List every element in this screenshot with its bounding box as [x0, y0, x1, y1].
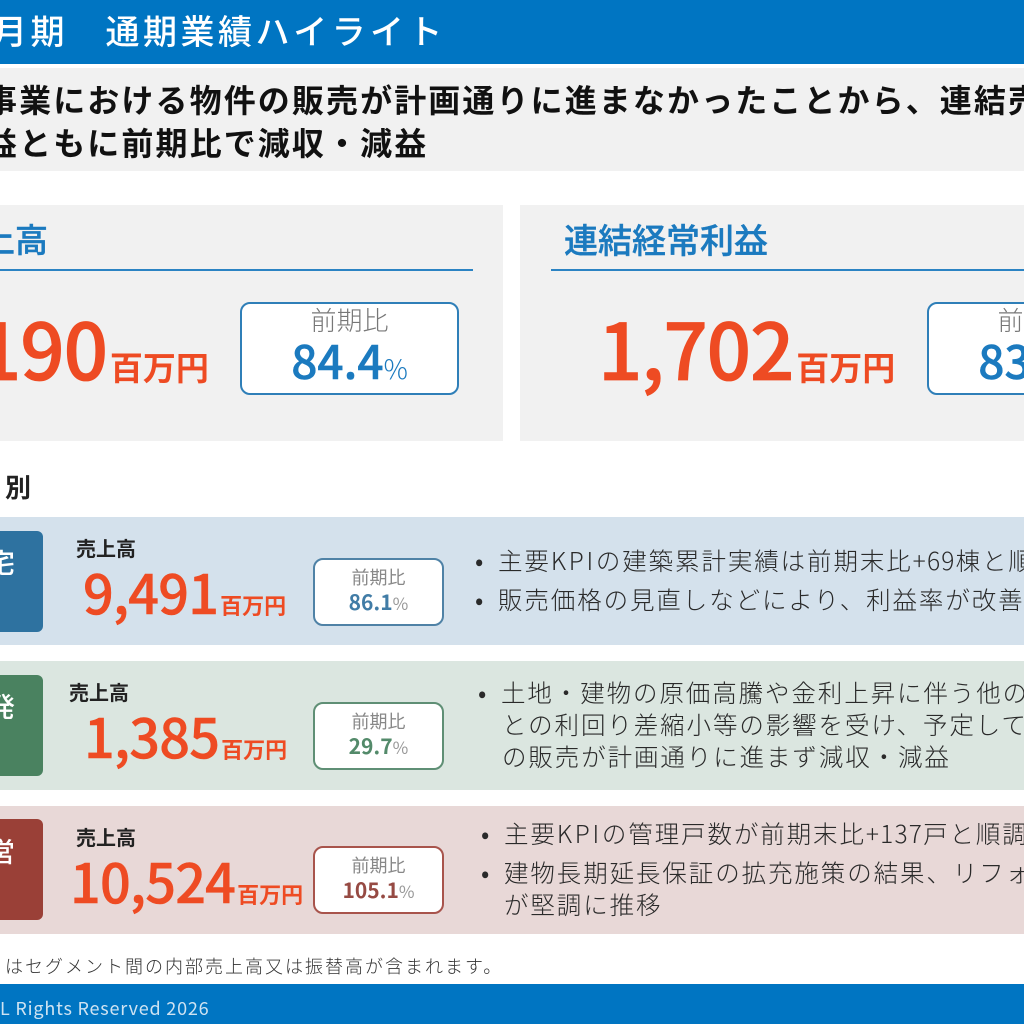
sales label: 売上高 — [76, 533, 136, 562]
segment chip — [0, 819, 43, 920]
sales label: 売上高 — [69, 677, 129, 706]
heading: ordinary profit: 連結経常利益 — [564, 214, 768, 263]
sales value: 9,491百万円 — [83, 551, 286, 630]
panel: segment 1 — [0, 517, 1024, 645]
bullet 1: • — [475, 543, 483, 578]
sales label: 売上高 — [76, 822, 136, 851]
year over year box — [313, 702, 444, 770]
year over year box — [313, 846, 444, 914]
value: 29.7% — [349, 731, 408, 761]
footnote: はセグメント間の内部売上高又は振替高が含まれます。 — [5, 953, 503, 979]
segment chip — [0, 675, 43, 776]
value: 105.1% — [342, 875, 415, 905]
value: 86.1% — [349, 587, 408, 617]
header bar — [0, 0, 1024, 64]
year over year box — [927, 302, 1024, 395]
panel: consolidated sales — [0, 205, 503, 441]
summary panel — [0, 68, 1024, 171]
panel: segment 2 — [0, 661, 1024, 790]
rule — [0, 269, 473, 271]
year over year box — [240, 302, 459, 395]
profit value: 1,702百万円 — [598, 291, 895, 403]
bullet 1: 主要KPIの管理戸数が前期末比+137戸と順調 — [504, 816, 1024, 851]
label: 前期比 — [352, 708, 406, 734]
panel: segment 3 — [0, 806, 1024, 934]
value: 84.4% — [291, 327, 408, 393]
bullets — [478, 675, 1024, 774]
summary text — [0, 76, 1024, 165]
rule — [551, 269, 1024, 271]
section heading: 別 — [5, 468, 31, 505]
bullet 1: • — [481, 816, 489, 851]
bullet 2: 建物長期延長保証の拡充施策の結果、リフォ — [504, 855, 1024, 890]
copyright: L Rights Reserved 2026 — [0, 995, 209, 1021]
bullets — [481, 816, 1024, 922]
label: 前期比 — [310, 301, 388, 338]
sales value: 10,524百万円 — [70, 840, 303, 919]
bullet 2: • — [481, 855, 489, 890]
bullet 2 — [481, 855, 1024, 922]
bullet 2: • — [475, 582, 483, 617]
panel: consolidated ordinary profit — [520, 205, 1024, 441]
sales value: 1,385百万円 — [84, 695, 287, 774]
bullet 2: 販売価格の見直しなどにより、利益率が改善 — [498, 582, 1024, 617]
label: 前期比 — [352, 852, 406, 878]
bullets: • — [478, 675, 486, 710]
bullets: 土地・建物の原価高騰や金利上昇に伴う他の — [501, 675, 1024, 710]
bullets — [475, 543, 1024, 617]
year over year box — [313, 558, 444, 626]
label: 前期比 — [352, 564, 406, 590]
footer bar — [0, 984, 1024, 1024]
title: 月期 通期業績ハイライト — [0, 5, 447, 54]
bullet 2: が堅調に推移 — [504, 887, 662, 922]
segment chip — [0, 531, 43, 632]
bullets: との利回り差縮小等の影響を受け、予定して — [502, 707, 1024, 742]
bullets: の販売が計画通りに進まず減収・減益 — [502, 739, 951, 774]
